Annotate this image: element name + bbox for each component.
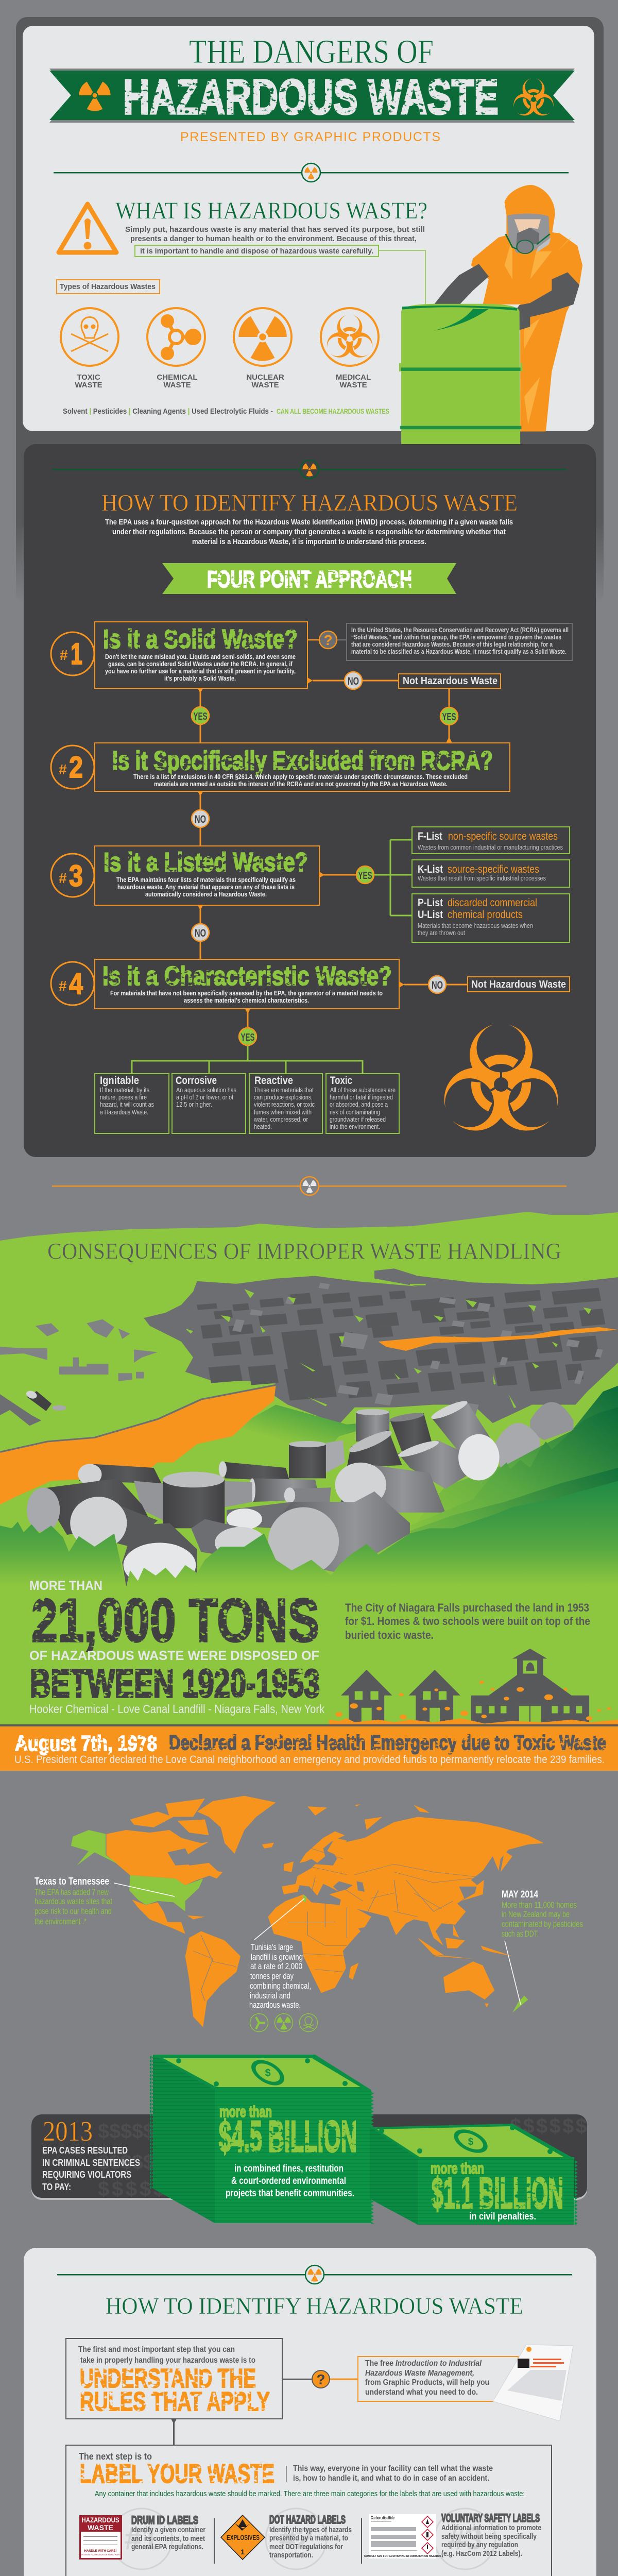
flow arrow: no to not hazardous: NO bbox=[348, 675, 359, 687]
money stack: $4.5 billion: projects that benefit communities. bbox=[226, 2188, 354, 2199]
list box: P and U lists: Materials that become hazardous wastes when bbox=[418, 922, 533, 929]
step 4: characteristic waste bbox=[51, 959, 399, 1009]
card: toxic: risk of contaminating bbox=[330, 1108, 380, 1116]
step 3: listed waste: hazardous waste. Any material that appears on any of these lists is bbox=[117, 884, 295, 891]
city bbox=[0, 1268, 618, 1432]
card: reactive: water, compressed, or bbox=[253, 1115, 308, 1123]
image: explosives diamond: 1 bbox=[241, 2548, 245, 2556]
text: Niagara Falls purchase: buried toxic waste. bbox=[345, 1629, 434, 1641]
callout: Tunisia landfill bbox=[249, 1899, 317, 2032]
icon: nuclear waste bbox=[234, 308, 291, 389]
badge #1: 1 bbox=[71, 637, 82, 671]
badge #2: # bbox=[59, 761, 67, 777]
money stack: $4.5 billion: in combined fines, restitution bbox=[234, 2163, 344, 2174]
list box: F-list: F-List bbox=[418, 831, 442, 842]
icon: chemical waste: WASTE bbox=[163, 381, 191, 389]
icon: toxic waste bbox=[61, 308, 118, 389]
info connector: question mark bbox=[307, 631, 347, 649]
callout: Tunisia landfill: industrial and bbox=[250, 1991, 290, 2001]
money stack: $4.5 billion bbox=[150, 2055, 374, 2224]
image: explosives diamond bbox=[221, 2515, 265, 2560]
caption bbox=[42, 2145, 140, 2192]
callout: Tunisia landfill: tonnes per day bbox=[250, 1971, 294, 1981]
dollar pattern: $$$$$ bbox=[98, 2120, 154, 2143]
flow arrow: yes to lists: YES bbox=[358, 870, 372, 882]
school bbox=[471, 1649, 589, 1725]
card: toxic: groundwater if released bbox=[330, 1115, 386, 1123]
heading: HOW TO IDENTIFY HAZARDOUS WASTE bbox=[101, 489, 518, 516]
icon: nuclear waste: NUCLEAR bbox=[246, 373, 284, 382]
banner: four point approach: FOUR POINT APPROACH bbox=[207, 566, 412, 592]
intro text: under their regulations. Because the person or company that generates a waste is responsible for determining whether that bbox=[112, 528, 506, 536]
toxic slime bbox=[329, 1681, 618, 1726]
heading: HOW TO IDENTIFY HAZARDOUS WASTE bbox=[106, 2293, 523, 2319]
column: drum ID labels: DRUM ID LABELS bbox=[131, 2514, 198, 2527]
connector: to next step bbox=[171, 2419, 177, 2445]
stat: 21,000 tons: MORE THAN bbox=[29, 1579, 102, 1593]
flow arrow: yes to characteristics: YES bbox=[241, 1032, 254, 1043]
text: sources of waste: CAN ALL BECOME HAZARDOUS WASTES bbox=[277, 407, 389, 415]
caption: TO PAY: bbox=[42, 2182, 71, 2192]
caption: EPA CASES RESULTED bbox=[42, 2145, 128, 2156]
callout: Tunisia landfill: hazardous waste. bbox=[249, 2000, 301, 2010]
badge #4: # bbox=[59, 978, 67, 994]
step 1: solid waste: it's probably a Solid Waste. bbox=[164, 675, 236, 682]
barrel bbox=[401, 304, 520, 444]
caption: REQUIRING VIOLATORS bbox=[42, 2170, 131, 2180]
list box: P and U lists: chemical products bbox=[448, 909, 523, 921]
stat: 21,000 tons: 21,000 TONS bbox=[31, 1586, 319, 1655]
card: corrosive: Corrosive bbox=[176, 1075, 217, 1087]
box: label your waste: LABEL YOUR WASTE bbox=[80, 2459, 274, 2489]
card: reactive: violent reactions, or toxic bbox=[254, 1100, 315, 1108]
column: voluntary safety labels: #3 bbox=[448, 2521, 482, 2556]
card: ignitable: Ignitable bbox=[100, 1075, 139, 1087]
box: free introduction guide: The free Introduction to Industrial bbox=[365, 2359, 482, 2368]
connector: question mark bbox=[282, 2370, 358, 2388]
image: guide booklet bbox=[493, 2345, 573, 2421]
panel: EPA 2013 cases bbox=[31, 2114, 587, 2200]
intro text: The EPA uses a four-question approach for the Hazardous Waste Identification (HWID) process, determining if a given waste falls bbox=[105, 518, 513, 527]
callout: Tunisia landfill: combining chemical, bbox=[250, 1981, 311, 1991]
subtitle: PRESENTED BY GRAPHIC PRODUCTS bbox=[180, 130, 440, 144]
column: drum ID labels: general EPA regulations. bbox=[131, 2543, 203, 2551]
step 3: listed waste bbox=[51, 846, 319, 905]
callout: Tunisia landfill: at a rate of 2,000 bbox=[250, 1961, 302, 1971]
image: hazardous waste label: HANDLE WITH CARE! bbox=[84, 2550, 116, 2553]
column: DOT hazard labels: presented by a material, to bbox=[269, 2534, 348, 2543]
callout: Texas to Tennessee: pose risk to our health and bbox=[35, 1906, 112, 1916]
column: drum ID labels: Identify a given container bbox=[131, 2526, 205, 2534]
intro text: material is a Hazardous Waste, it is important to understand this process. bbox=[192, 537, 426, 546]
money stack: $1.1 billion: more than bbox=[431, 2159, 484, 2177]
card: corrosive: An aqueous solution has bbox=[176, 1086, 236, 1094]
icon: radiation bbox=[77, 80, 112, 111]
intro text: Simply put, hazardous waste is any material that has served its purpose, but still bbox=[125, 225, 425, 234]
info box: RCRA: In the United States, the Resource Conservation and Recovery Act (RCRA) governs all bbox=[351, 626, 569, 634]
column: DOT hazard labels: meet DOT regulations for bbox=[269, 2543, 343, 2551]
dollar pattern: $$$$$$ bbox=[510, 2115, 587, 2138]
card: reactive bbox=[249, 1074, 322, 1133]
info box: RCRA: material to be classified as a Hazardous Waste, it must first qualify as a Solid Waste. bbox=[351, 648, 566, 655]
icon: toxic waste: WASTE bbox=[75, 381, 102, 389]
borders bbox=[193, 1849, 481, 2001]
image: hazardous waste label: WASTE bbox=[88, 2523, 113, 2532]
callout: Tunisia landfill: Tunisia's large bbox=[251, 1942, 293, 1952]
list box: P and U lists: U-List bbox=[418, 909, 443, 921]
icon: chemical waste: CHEMICAL bbox=[157, 373, 198, 382]
money stack: $1.1 billion: in civil penalties. bbox=[469, 2211, 536, 2222]
dollar seal: $ bbox=[468, 2137, 474, 2147]
box: understand the rules bbox=[66, 2338, 282, 2419]
column: drum ID labels: and its contents, to meet bbox=[131, 2534, 205, 2543]
card: reactive: Reactive bbox=[254, 1075, 293, 1087]
callout: May 2014 New Zealand: contaminated by pesticides bbox=[502, 1919, 583, 1929]
flow arrow: yes to question 2: YES bbox=[194, 711, 207, 722]
list box: K-list: source-specific wastes bbox=[448, 863, 539, 875]
highlighted regions in green bbox=[71, 1830, 528, 2013]
dollar seal bbox=[247, 2055, 288, 2091]
box: free introduction guide: Hazardous Waste Management, bbox=[365, 2369, 474, 2378]
card: ignitable: nature, poses a fire bbox=[100, 1093, 147, 1101]
callout: Texas to Tennessee: the environment .* bbox=[35, 1917, 87, 1926]
flow arrow: no to question 3 bbox=[192, 791, 209, 846]
icon: large biohazard bbox=[434, 1025, 569, 1142]
flow arrow: yes from not hazardous bbox=[440, 688, 458, 743]
column: drum ID labels bbox=[79, 2509, 205, 2569]
illustration: landfill city and barrels bbox=[0, 1268, 618, 1649]
intro text bbox=[105, 518, 513, 546]
badge #4 bbox=[51, 962, 94, 1005]
flow arrow: yes to lists bbox=[319, 840, 412, 916]
step 3: listed waste: automatically considered a Hazardous Waste. bbox=[145, 891, 267, 898]
card: reactive: fumes when mixed with bbox=[254, 1108, 312, 1116]
figure: worker in hazmat suit with barrel bbox=[400, 185, 582, 444]
money stack: $4.5 billion: more than bbox=[219, 2103, 272, 2121]
card: ignitable: hazard, it will count as bbox=[100, 1100, 154, 1108]
box: label your waste bbox=[66, 2445, 552, 2576]
list box: P and U lists: they are thrown out bbox=[418, 929, 465, 937]
callout: May 2014 New Zealand: MAY 2014 bbox=[502, 1889, 538, 1900]
year: 2013 bbox=[43, 2115, 93, 2147]
text: Niagara Falls purchase: The City of Niagara Falls purchased the land in 1953 bbox=[345, 1601, 589, 1614]
flow arrow: yes from not hazardous: YES bbox=[442, 711, 456, 723]
badge #2 bbox=[51, 745, 94, 789]
barrel pile bbox=[27, 1398, 574, 1587]
list box: F-list: non-specific source wastes bbox=[448, 831, 558, 842]
panel: how to identify hazardous waste bbox=[24, 444, 596, 1157]
flow arrow: no to question 4 bbox=[192, 905, 209, 959]
callout: May 2014 New Zealand bbox=[502, 1889, 583, 2005]
column: DOT hazard labels bbox=[221, 2509, 352, 2569]
step 1: solid waste: Is it a Solid Waste? bbox=[103, 624, 298, 654]
column: voluntary safety labels: safety without being specifically bbox=[441, 2532, 537, 2541]
result: not hazardous waste: Not Hazardous Waste bbox=[471, 979, 566, 990]
column: voluntary safety labels: Additional information to promote bbox=[441, 2523, 541, 2532]
money stack: $4.5 billion: & court-ordered environmental bbox=[231, 2176, 346, 2187]
info box: RCRA: that are considered Hazardous Wastes. Because of this legal relationship, for a bbox=[351, 641, 553, 648]
divider bbox=[57, 2265, 572, 2284]
icon: biohazard bbox=[510, 78, 557, 120]
callout: May 2014 New Zealand: such as DDT. bbox=[502, 1929, 539, 1939]
connector: question mark: ? bbox=[316, 2371, 325, 2387]
step 2: excluded from RCRA: Is it Specifically Excluded from RCRA? bbox=[112, 746, 493, 776]
step 4: characteristic waste: Is it a Characteristic Waste? bbox=[102, 961, 392, 991]
callout: May 2014 New Zealand: in New Zealand may be bbox=[502, 1909, 570, 1919]
image: GHS label bbox=[364, 2514, 442, 2558]
text: sources of waste bbox=[63, 407, 389, 416]
legs and suit bbox=[471, 230, 582, 432]
icon: nuclear waste: WASTE bbox=[251, 381, 279, 389]
column: voluntary safety labels bbox=[364, 2509, 541, 2569]
icon: warning triangle bbox=[59, 204, 116, 252]
house 1 bbox=[341, 1670, 392, 1725]
info box: RCRA: “Solid Wastes,” and within that group, the EPA is empowered to govern the wastes bbox=[351, 634, 561, 641]
intro text: presents a danger to human health or to the environment. Because of this threat, bbox=[130, 234, 417, 243]
icon: medical waste: WASTE bbox=[339, 381, 367, 389]
back grass bbox=[414, 1386, 618, 1526]
callout: Texas to Tennessee: Texas to Tennessee bbox=[35, 1876, 109, 1887]
result: not hazardous waste bbox=[468, 977, 570, 992]
card: reactive: can produce explosions, bbox=[254, 1093, 313, 1101]
card: corrosive: a pH of 2 or lower, or of bbox=[176, 1093, 233, 1101]
column: drum ID labels: #1 bbox=[125, 2521, 159, 2556]
list box: P and U lists: P-List bbox=[418, 897, 443, 909]
card: ignitable: If the material, by its bbox=[100, 1086, 149, 1094]
box: understand the rules: UNDERSTAND THE bbox=[80, 2364, 256, 2394]
list box: F-list bbox=[412, 827, 570, 854]
intro frame bbox=[16, 17, 604, 604]
gloves bbox=[434, 264, 489, 305]
callout: May 2014 New Zealand: More than 11,000 homes bbox=[502, 1900, 577, 1910]
badge #1 bbox=[51, 632, 94, 675]
flow arrow: yes to question 2 bbox=[192, 688, 209, 743]
image: explosives diamond: EXPLOSIVES bbox=[227, 2533, 260, 2541]
title: the dangers of: THE DANGERS OF bbox=[189, 33, 434, 71]
illustration: houses and school in toxic waste bbox=[329, 1649, 618, 1726]
step 1: solid waste bbox=[51, 622, 307, 688]
money stack: $1.1 billion bbox=[370, 2124, 577, 2225]
flow arrow: no to question 3: NO bbox=[195, 814, 206, 825]
panel: consequences landscape bbox=[0, 1212, 618, 1726]
dollar pattern: $$$$$ bbox=[98, 2151, 154, 2174]
foreground grass bbox=[0, 1481, 618, 1649]
list box: K-list bbox=[412, 860, 570, 887]
flow arrow: yes to characteristics bbox=[132, 1009, 363, 1074]
panel: what is hazardous waste bbox=[23, 26, 594, 444]
step 1: solid waste: gases, can be considered Solid Wastes under the RCRA. In general, if bbox=[108, 660, 293, 668]
badge #2: 2 bbox=[69, 751, 83, 784]
house 2 bbox=[409, 1670, 460, 1725]
icon: medical waste bbox=[321, 308, 379, 389]
box: label your waste: is, how to handle it, and what to do in case of an accident. bbox=[293, 2474, 489, 2483]
image: hazardous waste label: CONTENTS HAZARDOUS OR TOXIC WASTE bbox=[79, 2553, 122, 2556]
callout: Tunisia landfill: landfill is growing bbox=[251, 1952, 303, 1962]
card: toxic: Toxic bbox=[330, 1075, 352, 1087]
list box: P and U lists bbox=[412, 894, 570, 942]
continents bbox=[107, 1796, 544, 2027]
dollar seal bbox=[450, 2125, 491, 2158]
icons: waste types bbox=[250, 2013, 317, 2032]
column: voluntary safety labels: required by any regulation bbox=[441, 2540, 518, 2549]
column: DOT hazard labels: transportation. bbox=[269, 2551, 313, 2560]
panel: how to identify (next steps) bbox=[24, 2248, 596, 2576]
column: voluntary safety labels: (e.g. HazCom 2012 Labels). bbox=[441, 2549, 522, 2558]
badge #3 bbox=[51, 854, 94, 897]
divider bbox=[54, 163, 569, 182]
callout: Texas to Tennessee: hazardous waste sites that bbox=[35, 1896, 112, 1906]
image: hazardous waste label: HAZARDOUS bbox=[81, 2516, 119, 2524]
dollar pattern bbox=[98, 2115, 587, 2200]
divider bbox=[52, 1177, 566, 1195]
callout: handle carefully bbox=[135, 245, 425, 304]
money stack: $4.5 billion: $4.5 BILLION bbox=[219, 2112, 357, 2161]
dollar pattern: $$$$$ bbox=[98, 2178, 165, 2200]
text: sources of waste: Solvent | Pesticides | Cleaning Agents | Used Electrolytic Fluids - bbox=[63, 407, 273, 416]
label: types of hazardous wastes: Types of Hazardous Wastes bbox=[60, 282, 156, 291]
heading: what is hazardous waste: WHAT IS HAZARDOUS WASTE? bbox=[115, 197, 427, 224]
image: hazardous waste label bbox=[79, 2515, 122, 2560]
dollar seal: $ bbox=[265, 2067, 271, 2079]
step 4: characteristic waste: assess the material's chemical characteristics. bbox=[184, 997, 309, 1004]
mid grass ridge bbox=[410, 1408, 618, 1547]
card: ignitable: a Hazardous Waste. bbox=[100, 1108, 148, 1116]
stat: 21,000 tons: OF HAZARDOUS WASTE WERE DISPOSED OF bbox=[29, 1649, 319, 1663]
info connector: question mark: ? bbox=[323, 632, 333, 648]
icon: medical waste: MEDICAL bbox=[336, 373, 371, 382]
caption: IN CRIMINAL SENTENCES bbox=[42, 2158, 140, 2168]
card: toxic: into the environment. bbox=[330, 1123, 380, 1130]
banner: hazardous waste: HAZARDOUS WASTE bbox=[123, 70, 499, 125]
step 4: characteristic waste: For materials that have not been specifically assessed by the EPA, the generator of a material needs to bbox=[110, 990, 383, 997]
banner: August 7th 1978 bbox=[0, 1724, 618, 1771]
callout: Texas to Tennessee: The EPA has added 7 new bbox=[35, 1887, 109, 1897]
box: label your waste: This way, everyone in your facility can tell what the waste bbox=[293, 2464, 493, 2473]
image: GHS label: Carbon disulfide bbox=[371, 2515, 394, 2520]
text: Niagara Falls purchase bbox=[345, 1601, 590, 1641]
step 1: solid waste: you have no further use for a material that is still present in your facility, bbox=[105, 668, 296, 675]
list box: P and U lists: discarded commercial bbox=[448, 897, 537, 909]
list box: K-list: Wastes that result from specific industrial processes bbox=[418, 874, 546, 882]
callout: handle carefully: it is important to handle and dispose of hazardous waste carefully. bbox=[140, 247, 373, 256]
list box: F-list: Wastes from common industrial or manufacturing practices bbox=[418, 843, 563, 851]
step 2: excluded from RCRA: There is a list of exclusions in 40 CFR §261.4, which apply to specific materials under specific circumstances. These excluded bbox=[133, 773, 468, 781]
flow arrow: no to not hazardous bbox=[307, 672, 399, 689]
box: free introduction guide: understand what you need to do. bbox=[365, 2388, 478, 2397]
intro text bbox=[125, 225, 425, 243]
banner: August 7th 1978: August 7th, 1978 bbox=[15, 1731, 157, 1755]
label: types of hazardous wastes bbox=[57, 280, 160, 294]
card: ignitable bbox=[95, 1074, 169, 1133]
box: free introduction guide: from Graphic Products, will help you bbox=[365, 2378, 489, 2387]
icon: chemical waste bbox=[147, 308, 205, 389]
icon: toxic waste: TOXIC bbox=[77, 373, 100, 382]
badge #3: # bbox=[59, 870, 67, 886]
step 2: excluded from RCRA bbox=[51, 743, 510, 791]
box: label your waste: The next step is to bbox=[79, 2451, 152, 2462]
callout: Texas to Tennessee bbox=[35, 1876, 175, 1926]
step 2: excluded from RCRA: materials are named as outside the interest of the RCRA and are not governed by the EPA as Hazardous Waste. bbox=[154, 781, 448, 788]
badge #1: # bbox=[60, 647, 68, 663]
column: voluntary safety labels: VOLUNTARY SAFETY LABELS bbox=[441, 2512, 540, 2524]
Hudson Bay and Caspian bbox=[167, 1849, 365, 1892]
stat: 21,000 tons: Hooker Chemical - Love Canal Landfill - Niagara Falls, New York bbox=[29, 1702, 324, 1716]
box: free introduction guide bbox=[358, 2357, 518, 2401]
column: DOT hazard labels: #2 bbox=[279, 2521, 313, 2556]
column: DOT hazard labels: Identify the types of hazards bbox=[269, 2526, 352, 2534]
card: toxic bbox=[326, 1074, 399, 1133]
card: toxic: harmful or fatal if ingested bbox=[330, 1093, 393, 1101]
hood bbox=[505, 185, 555, 240]
card: toxic: or absorbed, and pose a bbox=[330, 1100, 388, 1108]
box: understand the rules: take in properly handling your hazardous waste is to bbox=[80, 2356, 255, 2365]
world map bbox=[35, 1796, 583, 2032]
divider bbox=[52, 460, 566, 479]
card: reactive: These are materials that bbox=[254, 1086, 314, 1094]
box: label your waste: Any container that includes hazardous waste should be marked. There are three main categories for the labels that are used with hazardous waste: bbox=[95, 2489, 525, 2498]
box: understand the rules: RULES THAT APPLY bbox=[80, 2387, 270, 2417]
card: toxic: All of these substances are bbox=[330, 1086, 396, 1094]
result: not hazardous waste: Not Hazardous Waste bbox=[403, 675, 497, 687]
flow arrow: no to result bbox=[399, 976, 468, 993]
stat: 21,000 tons bbox=[29, 1579, 324, 1716]
mid hill bbox=[158, 1405, 394, 1473]
step 3: listed waste: Is it a Listed Waste? bbox=[104, 848, 308, 877]
heading: CONSEQUENCES OF IMPROPER WASTE HANDLING bbox=[47, 1239, 561, 1264]
image: GHS label: CONSULT SDS FOR ADDITIONAL INFORMATION ON HAZARDS bbox=[364, 2555, 442, 2558]
column: DOT hazard labels: DOT HAZARD LABELS bbox=[269, 2513, 346, 2526]
banner: four point approach bbox=[162, 563, 456, 594]
info box: RCRA bbox=[347, 623, 572, 660]
step 3: listed waste: The EPA maintains four lists of materials that specifically qualify as bbox=[116, 876, 296, 884]
river of toxic waste bbox=[0, 1327, 618, 1504]
mask bbox=[507, 214, 550, 253]
card: corrosive bbox=[172, 1074, 246, 1133]
flow arrow: no to result: NO bbox=[432, 979, 443, 991]
box: understand the rules: The first and most important step that you can bbox=[78, 2345, 235, 2354]
badge #3: 3 bbox=[69, 859, 83, 893]
card: reactive: heated. bbox=[254, 1123, 272, 1130]
badge #4: 4 bbox=[69, 967, 83, 1001]
card: corrosive: 12.5 or higher. bbox=[176, 1100, 212, 1108]
list box: K-list: K-List bbox=[418, 863, 443, 875]
step 1: solid waste: Don't let the name mislead you. Liquids and semi-solids, and even some bbox=[105, 653, 296, 660]
flow arrow: no to question 4: NO bbox=[195, 927, 206, 939]
grass field bbox=[0, 1212, 618, 1724]
stat: 21,000 tons: BETWEEN 1920-1953 bbox=[30, 1662, 320, 1706]
